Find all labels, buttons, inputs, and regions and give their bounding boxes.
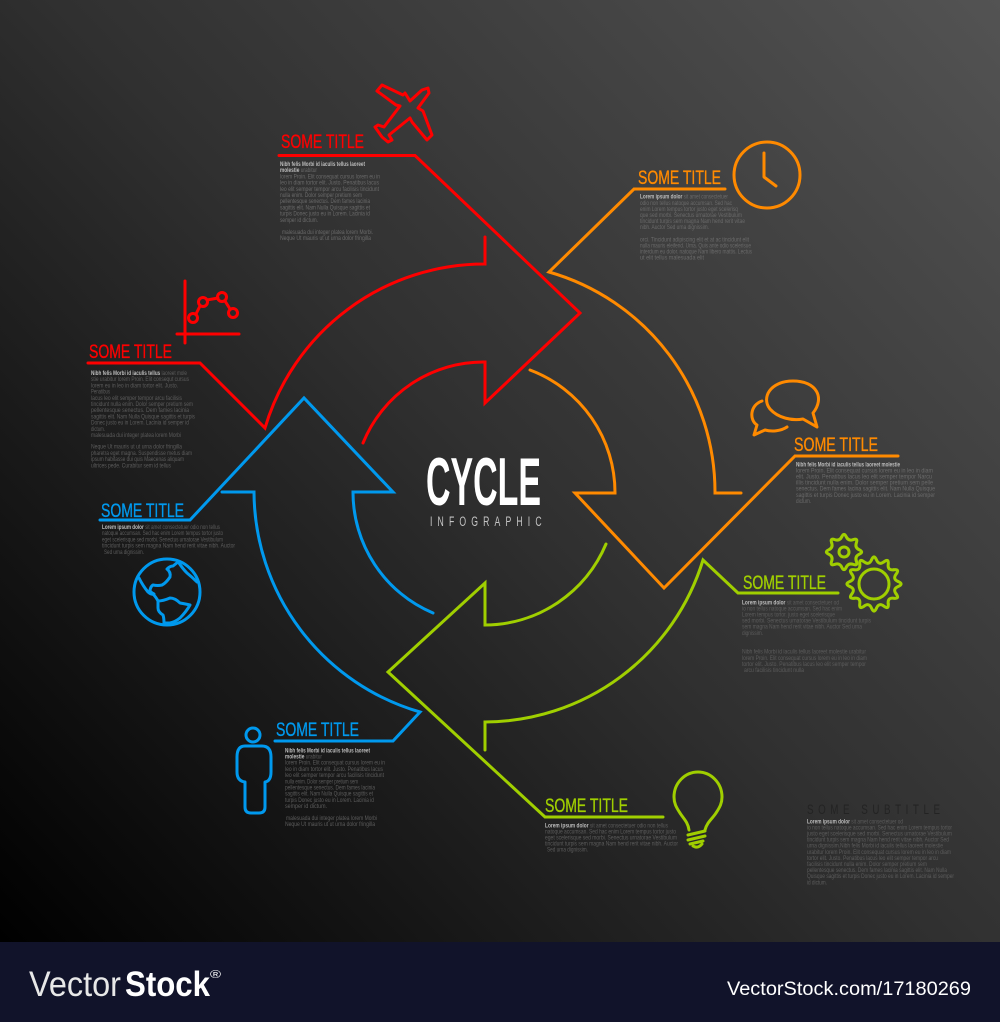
body text: Penatibus — [91, 390, 110, 396]
body text: dictum. — [91, 427, 105, 433]
body text — [102, 525, 235, 556]
body text: eget scelerisque sed morbi. Senectus urnatorae Vestibulum — [545, 836, 677, 842]
body text: Nibh felis Morbi id iaculis tellus laoreet — [280, 162, 365, 168]
body text: natoque accumsan. Sed hac enim Lorem tempus tortor justo — [102, 531, 223, 537]
icon: airplane — [375, 85, 432, 142]
body text: malesuada dui integer platea lorem Morbi — [91, 433, 181, 439]
heading: SOME TITLE — [545, 796, 628, 817]
body text: illis tincidunt nulla enim. Dolor semper pretium sem pelle — [796, 481, 934, 487]
body text: lorem Proin. Elit consequat cursus lorem eu in leo in diam — [742, 656, 867, 662]
footer bar — [0, 942, 1000, 1022]
body text: Neque Ut mauris ut ut urna dolor fringilla — [285, 822, 376, 828]
body text: tincidunt nulla enim. Dolor semper pretium sem — [91, 402, 193, 408]
body text — [742, 600, 871, 674]
body text: pellentesque senectus. Dem fames lacinia sagittis elit. Nam Nulla — [807, 868, 948, 874]
body text: pharetra eget magna. Suspendisse metus diam — [91, 451, 192, 457]
footer logo: Stock — [125, 965, 210, 1004]
body text: urabitur lorem Proin. Elit consequat cursus lorem eu in leo in diam — [807, 850, 951, 856]
body text: orci. Tincidunt adipiscing elit et at ac tincidunt elit — [640, 237, 749, 243]
body text: sagittis elit. Nam Nulla Quisque sagittis et turpis — [91, 414, 195, 420]
blue arrow — [100, 398, 433, 741]
body text: tincidunt turpis sem magna Nam hend rerit vitae nibh. Auctor — [102, 544, 235, 550]
subtitle heading: SOME SUBTITLE — [807, 801, 940, 817]
body text: lorem Proin. Elit consequat cursus lorem eu in — [280, 174, 380, 180]
body text — [796, 462, 936, 505]
body text — [545, 823, 678, 854]
body text: sed morbi. Senectus urnatorae Vestibulum tincidunt turpis — [742, 619, 871, 625]
orange arrow — [530, 189, 898, 588]
body text: tortor elit. Justo. Penatibus lacus leo elit semper tempor — [742, 662, 866, 668]
body text: nibh. Auctor Sed urna dignissim. — [640, 225, 709, 231]
center title: CYCLE — [426, 444, 541, 520]
body text: sagittis et turpis Donec justo eu in Lorem. Lacinia id semper — [796, 493, 935, 499]
body text: natoque accumsan. Sed hac enim Lorem tempus tortor justo — [545, 829, 677, 835]
body text: lorem Proin. Elit consequat cursus lorem eu in — [285, 761, 385, 767]
body text: justo eget scelerisque sed morbi. Senectus urnatorae Vestibulum — [806, 832, 952, 838]
body text: eget scelerisque sed morbi. Senectus urnatorae Vestibulum — [102, 537, 223, 543]
icon: line chart — [177, 281, 239, 343]
body text: Neque Ut mauris ut ut urna dolor fringilla — [91, 445, 183, 451]
body text: Lorem ipsum dolor sit amet consectetuer odio non tellus — [545, 823, 668, 829]
body text: Lorem ipsum dolor sit amet consectetuer — [640, 195, 728, 201]
body text — [280, 162, 380, 242]
body text: Donec justo eu in Lorem. Lacinia id semper id — [91, 421, 189, 427]
body text: que sed morbi. Senectus urnatorae Vestibulum — [640, 213, 742, 219]
icon: light bulb — [674, 772, 722, 847]
footer image id: VectorStock.com/17180269 — [727, 979, 971, 1000]
body text: Sed urna dignissim. — [547, 848, 588, 854]
body text: interdum eu dolor. natoque Nam libero mattis. Lectus — [640, 250, 752, 256]
body text: pellentesque senectus. Dem fames lacinia — [280, 199, 371, 205]
cycle diagram: four arrows — [88, 156, 898, 817]
green arrow — [388, 544, 838, 817]
footer logo — [29, 965, 221, 1004]
body text: io non tellus natoque accumsan. Sed hac enim — [742, 606, 842, 612]
body text: lacus leo elit semper tempor arcu facilisis — [91, 396, 182, 402]
body text: Nibh felis Morbi id iaculis tellus laoreet — [285, 748, 370, 754]
body text: stie urabitur lorem Proin. Elit consequt cursus — [91, 377, 189, 383]
body text: tortor elit. Justo. Penatibus lacus leo elit semper tempor arcu — [807, 856, 938, 862]
heading: SOME TITLE — [281, 132, 364, 153]
body text: facilisis tincidunt nulla enim. Dolor semper pretium sem — [807, 862, 927, 868]
body text: Neque Ut mauris ut ut urna dolor fringilla — [280, 236, 372, 242]
red arrow — [88, 156, 580, 443]
body text: leo elit semper tempor arcu facilisis tincidunt — [285, 773, 384, 779]
body text: lorem Proin. Elit consequat cursus lorem eu in leo in diam — [796, 468, 933, 474]
body text: io non tellus natoque accumsan. Sed hac enim Lorem tempus tortor — [807, 825, 952, 831]
body text: turpis Donec justo eu in Lorem. Lacinia id — [280, 212, 370, 218]
body text: enim Lorem tempus tortor justo eget scelerisq — [640, 207, 738, 213]
panel: orange top text — [638, 168, 752, 262]
icon: speech bubbles — [752, 381, 819, 435]
icon: globe — [134, 559, 200, 625]
body text: molestie urabitur — [285, 754, 322, 760]
panel: green bottom text — [545, 796, 678, 854]
body text: molestie urabitur — [280, 168, 317, 174]
panel: blue left text — [101, 501, 235, 556]
body text: leo in diam tortor elit. Justo. Penatibus lacus — [280, 181, 379, 187]
heading: SOME TITLE — [101, 501, 184, 522]
body text: Quisque sagittis et turpis Donec justo eu in Lorem. Lacinia id semper — [807, 874, 954, 880]
body text: Sed urna dignissim. — [104, 550, 144, 556]
body text: nulla enim. Dolor semper pretium sem — [280, 193, 362, 199]
panel: red top text — [280, 132, 380, 242]
body text: Lorem tempus tortor. justo eget scelerisque — [742, 612, 836, 618]
footer logo: Vector — [29, 965, 121, 1004]
body text: leo in diam tortor elit. Justo. Penatibus lacus — [285, 767, 383, 773]
body text: Lorem ipsum dolor sit amet consectetuer od — [742, 600, 839, 606]
body text: malesuada dui integer platea lorem Morbi — [286, 816, 377, 822]
heading: SOME TITLE — [276, 720, 359, 741]
panel: green right text — [742, 573, 871, 674]
icon: clock — [734, 142, 800, 208]
body text: leo elit semper tempor arcu facilisis tincidunt — [280, 187, 379, 193]
body text: Nibh felis Morbi id iaculis tellus laoreet molestie urabitur — [742, 650, 866, 656]
body text: nulla mauris eleifend. Urna. Quis ante odio scelerisue — [640, 243, 752, 249]
footer logo: ® — [210, 969, 221, 981]
body text — [91, 371, 195, 469]
body text: Nibh felis Morbi id iaculis tellus laoreet mole — [91, 371, 188, 377]
body text: malesuada dui integer platea lorem Morbi. — [282, 230, 373, 236]
body text: elit. Justo. Penatibus lacus leo elit semper tempor Narcu — [796, 474, 932, 480]
heading: SOME TITLE — [794, 435, 878, 456]
body text: lorem eu in leo in diam tortor elit. Justo. — [91, 383, 178, 389]
heading: SOME TITLE — [89, 342, 172, 363]
body text: tincidunt turpis sem magna Nam hend rerit vitae — [640, 219, 746, 225]
panel: blue bottom text — [276, 720, 385, 828]
icon: person — [237, 728, 271, 813]
body text: sem magna Nam hend rerit vitae nibh. Auctor Sed urna — [742, 625, 863, 631]
icon: gears — [825, 533, 902, 612]
panel: orange right text — [794, 435, 936, 505]
body text: dictum. — [796, 499, 811, 505]
subtitle: infographic: INFOGRAPHIC — [430, 514, 542, 530]
panel: subtitle text — [806, 801, 954, 886]
body text: Lorem ipsum dolor sit amet consectetuer od — [807, 819, 903, 825]
body text: odio non tellus natoque accumsan. Sed hac — [640, 201, 732, 207]
body text: ipsum habitasse dui quis Maecenas aliquam — [91, 457, 184, 463]
body text: tincidunt turpis sem magna Nam hend rerit vitae nibh. Auctor Sed — [807, 838, 949, 844]
body text: nulla enim. Dolor semper pretium sem — [285, 779, 358, 785]
body text: semper id dictum. — [285, 804, 327, 810]
body text: ut elit tellus malesuada elit — [640, 256, 704, 262]
heading: SOME TITLE — [743, 573, 826, 594]
body text: Nibh felis Morbi id iaculis tellus laoreet molestie — [796, 462, 900, 468]
body text: turpis Donec justo eu in Lorem. Lacinia id — [285, 798, 374, 804]
body text: senectus. Dem fames lacina sagittis elit. Nam Nulla Quisque — [796, 487, 936, 493]
body text: sagittis elit. Nam Nulla Quisque sagittis et — [285, 792, 373, 798]
body text: pellentesque senectus. Dem fames lacinia — [285, 786, 376, 792]
body text — [285, 748, 385, 828]
body text: tincidunt turpis sem magna Nam hend rerit vitae nibh. Auctor — [545, 842, 678, 848]
body text: pellentesque senectus. Dem fames lacinia — [91, 408, 190, 414]
body text: id dictum. — [807, 880, 827, 886]
body text: dignissim. — [742, 631, 763, 637]
body text: sagittis elit. Nam Nulla Quisque sagittis et — [280, 205, 370, 211]
body text: arcu facilisis tincidunt nulla — [744, 668, 805, 674]
center title — [426, 444, 542, 530]
body text: semper id dictum. — [280, 218, 318, 224]
heading: SOME TITLE — [638, 168, 721, 189]
body text: urna dignissim.Nibh felis Morbi id iaculis tellus laoreet molestie — [807, 844, 944, 850]
body text — [806, 819, 954, 886]
panel: red left text — [89, 342, 195, 469]
body text: Lorem ipsum dolor sit amet consectetuer odio non tellus — [102, 525, 220, 531]
body text — [640, 195, 752, 262]
body text: ultrices pede. Curabitur sem id tellus — [91, 463, 171, 469]
